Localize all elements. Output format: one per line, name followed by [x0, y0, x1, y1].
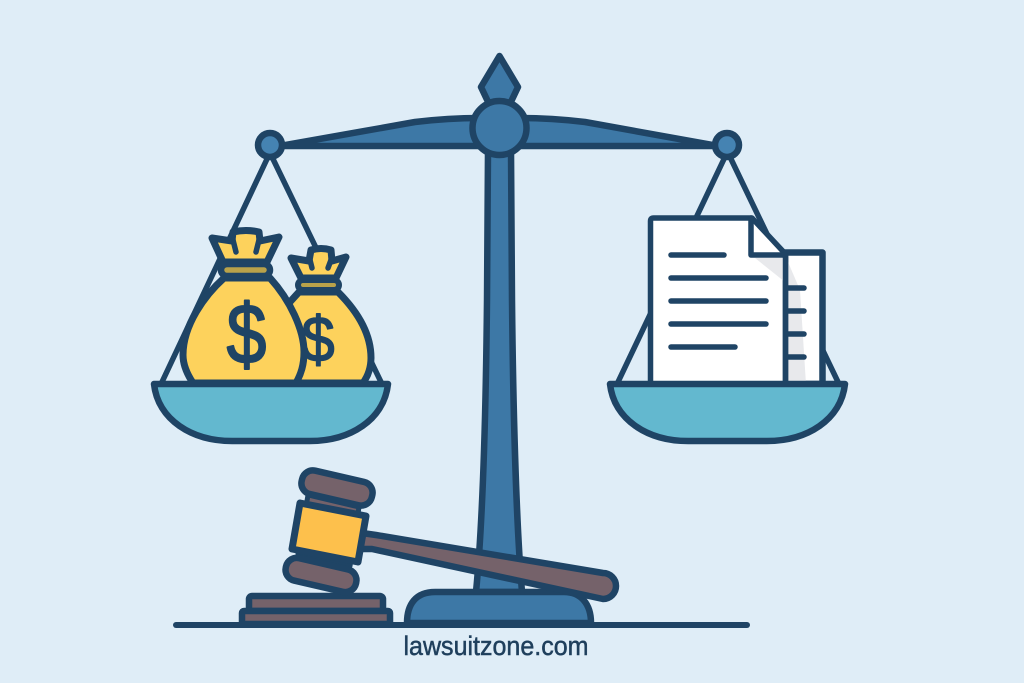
left pan strings [162, 159, 381, 382]
gavel head neck [298, 495, 359, 566]
ground line [176, 622, 747, 628]
front document [650, 218, 786, 384]
large money bag [183, 230, 304, 383]
left knob [258, 133, 282, 157]
right knob [715, 133, 739, 157]
left pan [154, 384, 388, 441]
front document text lines [671, 255, 766, 347]
back document text lines [787, 288, 804, 357]
finial [481, 56, 518, 106]
gavel top cap [299, 468, 375, 508]
gavel bottom cap [283, 556, 359, 594]
sounding block [242, 596, 390, 624]
scale column [476, 150, 522, 592]
central hub [472, 101, 526, 155]
right pan strings [618, 159, 838, 382]
small dollar sign: $ [301, 305, 335, 376]
scale beam [280, 118, 718, 146]
gavel head body [292, 503, 366, 562]
gavel handle [360, 533, 616, 599]
right pan [610, 384, 845, 441]
website label: lawsuitzone.com [404, 631, 588, 661]
gavel [283, 468, 616, 599]
column base [407, 592, 591, 623]
back document [785, 252, 822, 384]
large dollar sign: $ [227, 286, 266, 381]
small money bag [289, 248, 371, 383]
